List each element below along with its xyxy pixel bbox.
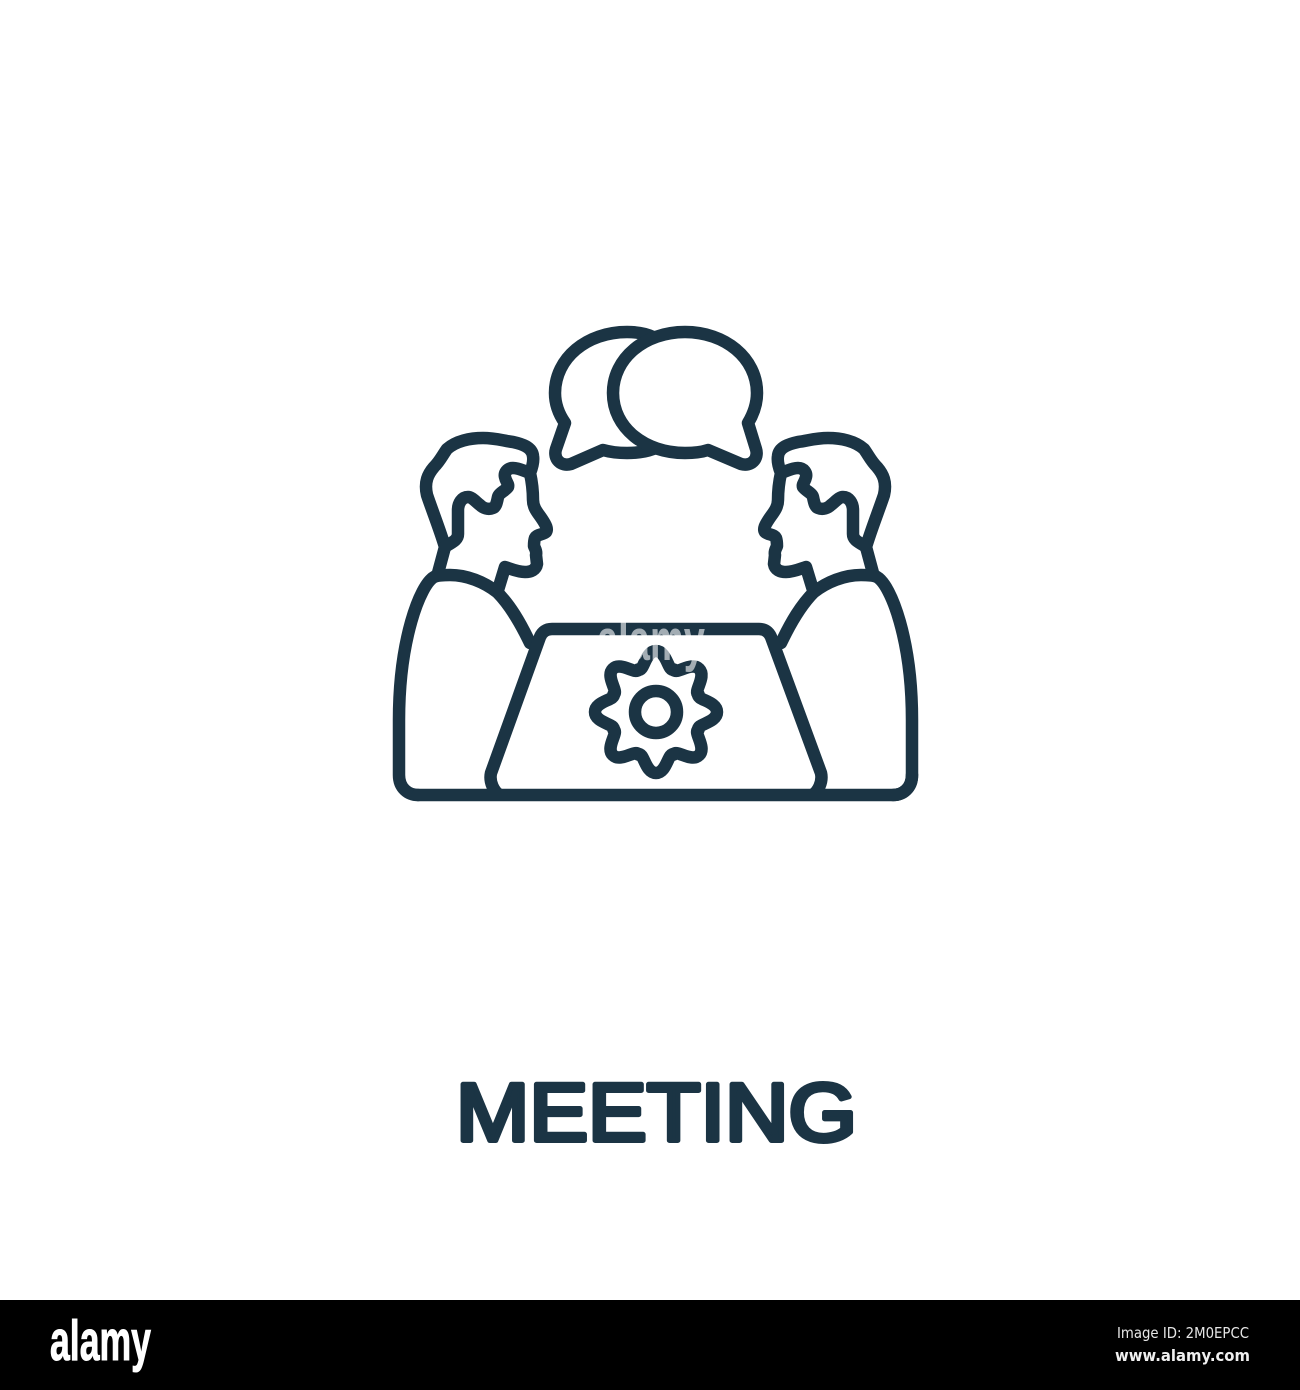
icon: back speech bubble xyxy=(555,332,653,465)
left person head xyxy=(426,438,547,590)
icon: front speech bubble xyxy=(613,332,757,465)
image id: Image ID: 2M0EPCC xyxy=(1117,1324,1249,1342)
right person head xyxy=(764,438,885,590)
footer bar xyxy=(0,1300,1300,1390)
icon: table xyxy=(418,629,912,795)
left person body xyxy=(399,575,530,795)
icon: left person xyxy=(399,438,547,795)
icon: meeting xyxy=(399,332,912,795)
right person hairline xyxy=(781,468,866,547)
title: MEETING xyxy=(456,1068,857,1158)
left person hairline xyxy=(445,468,530,547)
icon: right person xyxy=(764,438,912,795)
footer logo: alamy xyxy=(50,1309,151,1373)
right person body xyxy=(781,575,912,795)
icon: gear xyxy=(595,651,717,773)
website: www.alamy.com xyxy=(1115,1346,1250,1365)
watermark: alamy xyxy=(597,608,705,673)
